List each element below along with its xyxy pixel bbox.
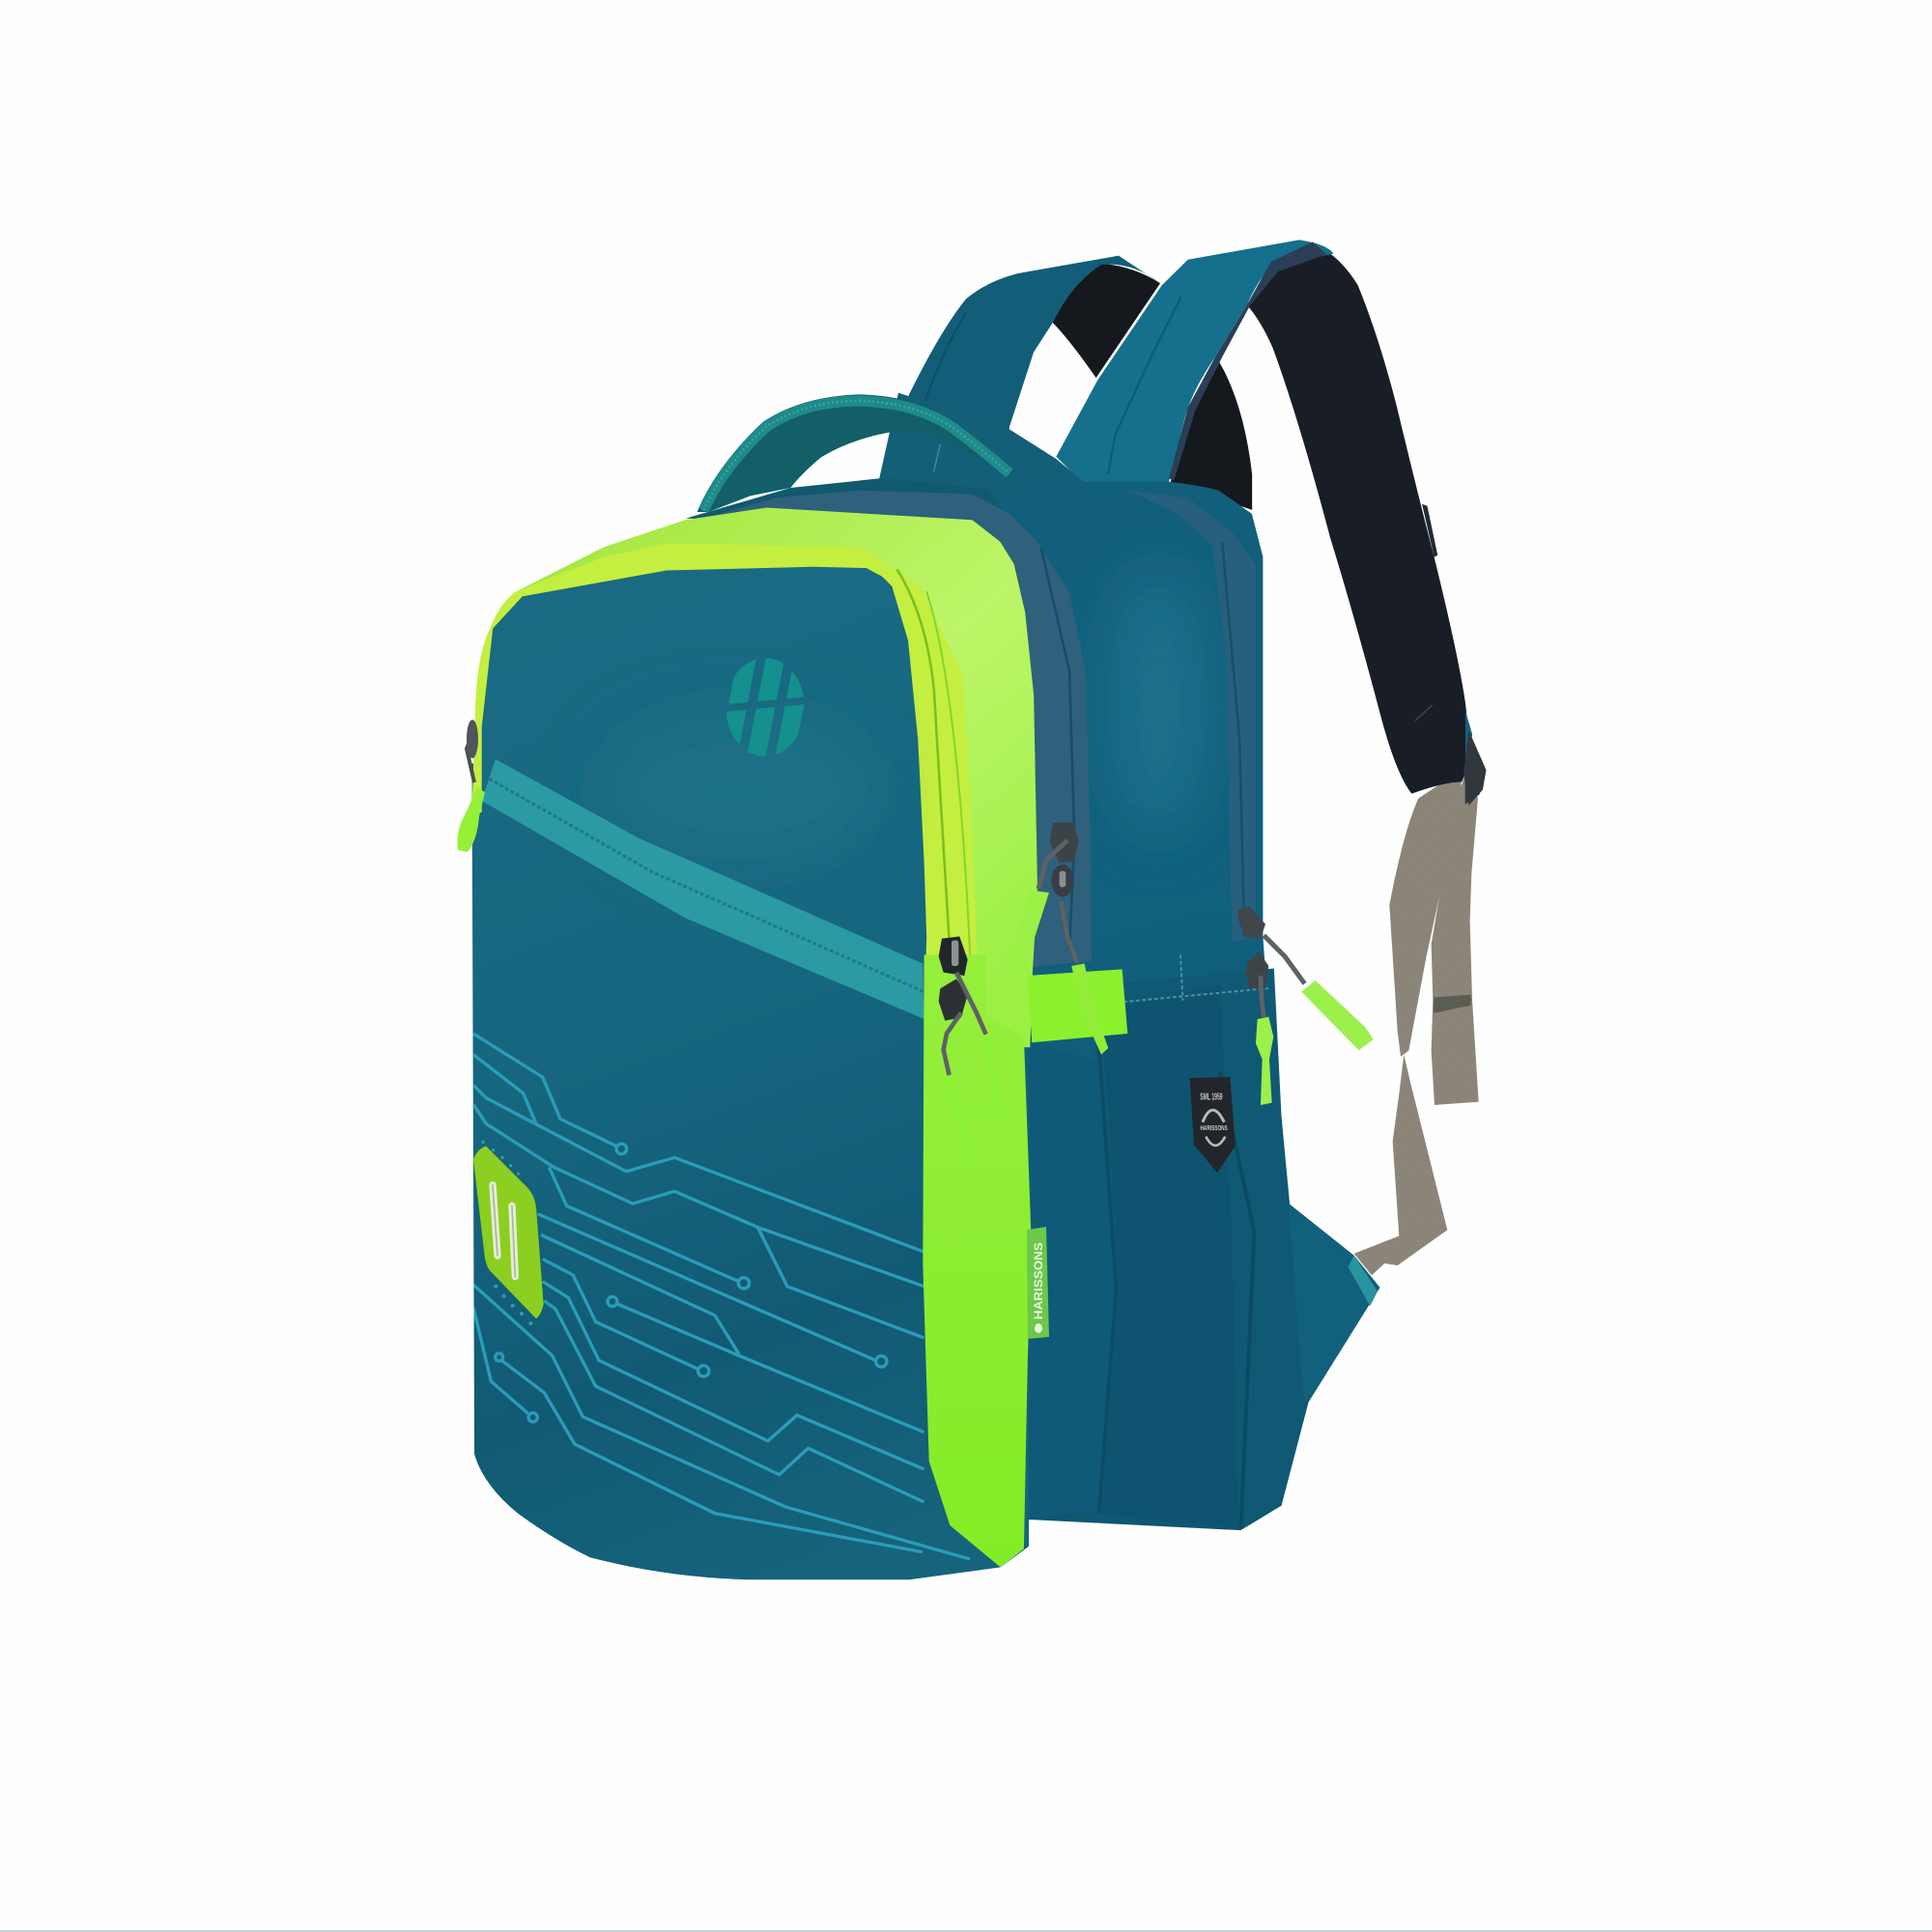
side panel [985, 482, 1380, 1530]
front pocket zipper pulls [939, 936, 1004, 1168]
front pocket inner panel [481, 566, 927, 978]
side zipper pulls [1004, 823, 1108, 1055]
circuit line print [473, 1034, 970, 1559]
carry handle [686, 393, 1085, 522]
embroidered logo [726, 658, 804, 756]
right zipper pulls [1237, 906, 1374, 1105]
lime side strap [1027, 969, 1127, 1042]
side gusset [1282, 1198, 1380, 1403]
top zipper band [715, 491, 1092, 967]
black brand badge: HARISSONS [1200, 1123, 1228, 1132]
lime front side strip [923, 955, 1032, 1567]
front shoulder strap with dark padding [1056, 240, 1486, 806]
left zipper pull [457, 720, 485, 852]
lime trim around front pocket [472, 508, 1037, 1047]
size tag: HARISSONS [1032, 1242, 1045, 1320]
rear shoulder strap [882, 256, 1160, 474]
satin highlight [604, 715, 875, 863]
side zipper band [1128, 491, 1256, 943]
front panel base [472, 491, 1092, 1579]
side pocket [1084, 969, 1303, 1528]
bottom edge strip [0, 1930, 1932, 1932]
teal diagonal zipper [482, 759, 924, 1019]
size tag [1027, 1227, 1049, 1339]
side highlight [1109, 567, 1208, 838]
grey webbing straps [1354, 724, 1485, 1275]
black brand badge: SML 1959 [1200, 1092, 1223, 1102]
lime rubber patch [473, 1141, 544, 1325]
black brand badge [1190, 1077, 1236, 1173]
